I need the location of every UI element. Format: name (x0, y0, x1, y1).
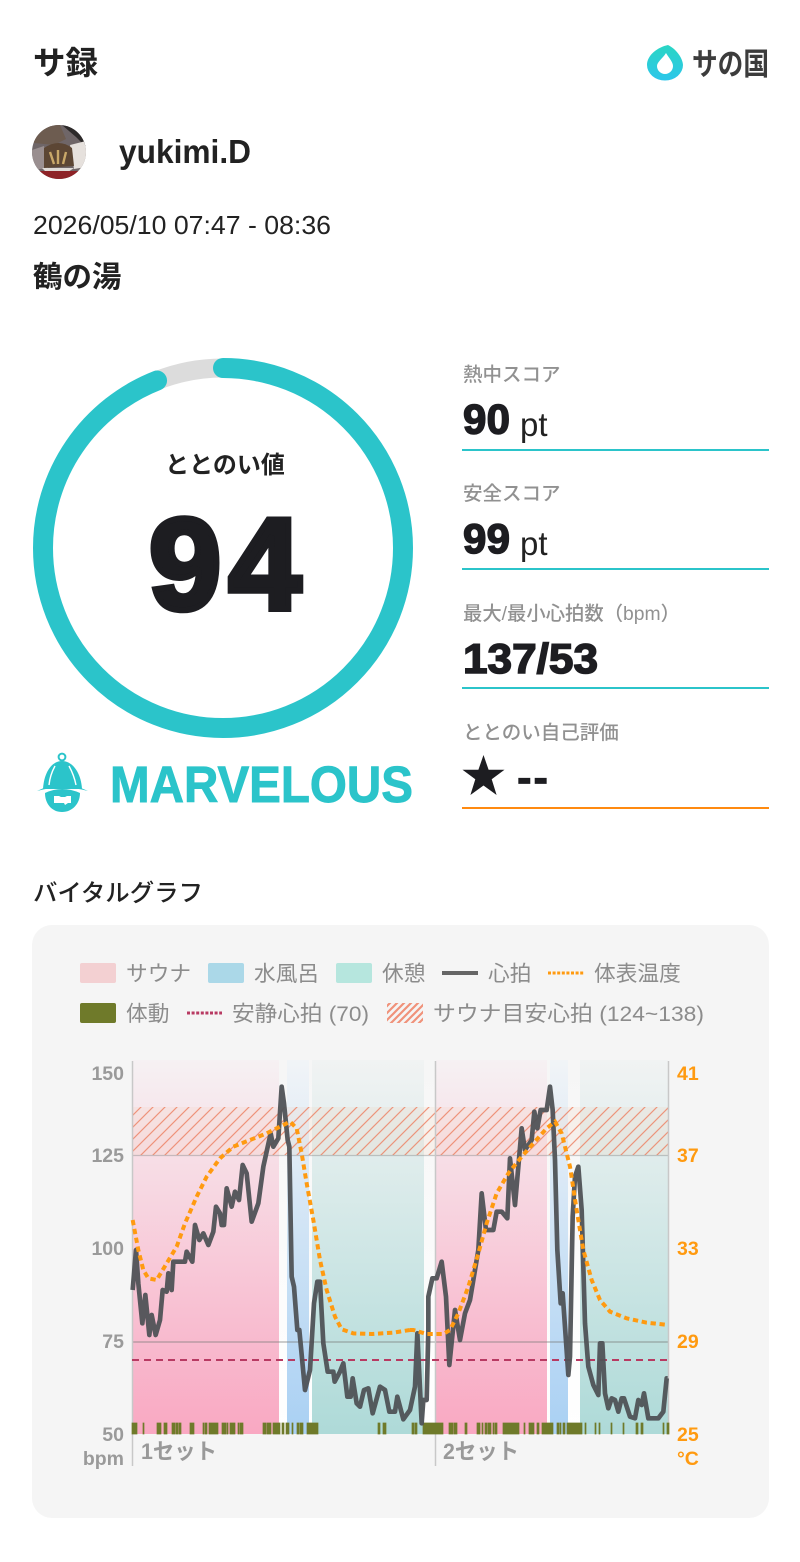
set 2 label: 2セット (443, 1439, 519, 1464)
stat: heat score: 熱中スコア (463, 364, 561, 386)
ring label: ととのい値 (165, 452, 285, 479)
heart rate line (133, 1087, 668, 1423)
icon: sauna hat (37, 754, 88, 812)
left axis labels: 150 (91, 1063, 124, 1085)
legend: sauna (80, 961, 191, 986)
ring progress (43, 368, 403, 728)
chart (83, 1060, 699, 1470)
legend: cold bath (208, 961, 319, 986)
stat: self evaluation: ととのい自己評価 (463, 722, 619, 744)
score value: 94 (149, 491, 301, 637)
right axis labels (677, 1063, 699, 1470)
stat: max and min heart rate (462, 603, 769, 689)
icon: water drop (647, 45, 683, 80)
stat: self evaluation: -- (517, 753, 548, 802)
user name: yukimi.D (119, 133, 251, 170)
right axis labels: 37 (677, 1145, 699, 1167)
logo text: サの国 (692, 47, 769, 82)
left axis labels: 50 (102, 1424, 124, 1446)
right axis labels: 25 (677, 1424, 699, 1446)
legend: body movement: 体動 (126, 1001, 169, 1026)
stat: heat score (462, 364, 769, 451)
right axis labels: °C (677, 1448, 699, 1470)
body surface temperature line (133, 1122, 668, 1334)
vital graph heading: バイタルグラフ (33, 880, 203, 907)
stat: safety score: 99 (463, 515, 510, 562)
stat: max and min heart rate: 137/53 (463, 635, 598, 682)
panel: stats (462, 364, 769, 809)
right axis labels: 41 (677, 1063, 699, 1085)
phase bands (132, 1060, 668, 1434)
stat: safety score: pt (520, 525, 548, 562)
left axis labels: 100 (91, 1238, 124, 1260)
title: サ録 (33, 45, 98, 81)
resting heart rate line (132, 1359, 668, 1361)
stat: max and min heart rate: 最大/最小心拍数（bpm） (463, 603, 680, 625)
panel: vital graph card (32, 925, 769, 1518)
body movement ticks (132, 1423, 669, 1434)
stat: heat score: pt (520, 406, 548, 443)
stat: safety score: 安全スコア (463, 483, 561, 505)
legend: sauna: サウナ (126, 961, 191, 986)
legend: cold bath: 水風呂 (254, 961, 319, 986)
legend: sauna target heart rate: サウナ目安心拍 (124~138) (433, 1001, 704, 1026)
legend: body movement (80, 1001, 169, 1026)
rating badge (37, 754, 413, 813)
legend: rest (336, 961, 425, 986)
stat: heat score: 90 (463, 396, 510, 442)
stat: safety score (462, 483, 769, 570)
logo: sa no kuni (647, 45, 769, 82)
rating text: MARVELOUS (110, 756, 413, 813)
icon: star (462, 755, 504, 795)
stat: self evaluation (462, 722, 769, 809)
set 1 label: 1セット (141, 1439, 217, 1464)
legend: rest: 休憩 (382, 961, 425, 986)
right axis labels: 33 (677, 1238, 699, 1260)
ring track (43, 368, 403, 728)
legend (80, 961, 704, 1026)
date and time: 2026/05/10 07:47 - 08:36 (33, 210, 331, 240)
left axis labels: 125 (91, 1145, 124, 1167)
left axis labels: 75 (102, 1331, 124, 1353)
legend: body surface temperature (548, 961, 681, 986)
avatar (32, 125, 86, 180)
legend: resting heart rate: 安静心拍 (70) (232, 1001, 369, 1026)
sauna target heart rate band (132, 1107, 668, 1155)
legend: heart rate (442, 961, 531, 986)
right axis labels: 29 (677, 1331, 699, 1353)
legend: body surface temperature: 体表温度 (594, 961, 681, 986)
panel: totonoi score ring (43, 368, 403, 728)
left axis labels: bpm (83, 1448, 124, 1470)
legend: heart rate: 心拍 (488, 961, 531, 986)
facility name: 鶴の湯 (33, 261, 122, 294)
left axis labels (83, 1063, 124, 1470)
